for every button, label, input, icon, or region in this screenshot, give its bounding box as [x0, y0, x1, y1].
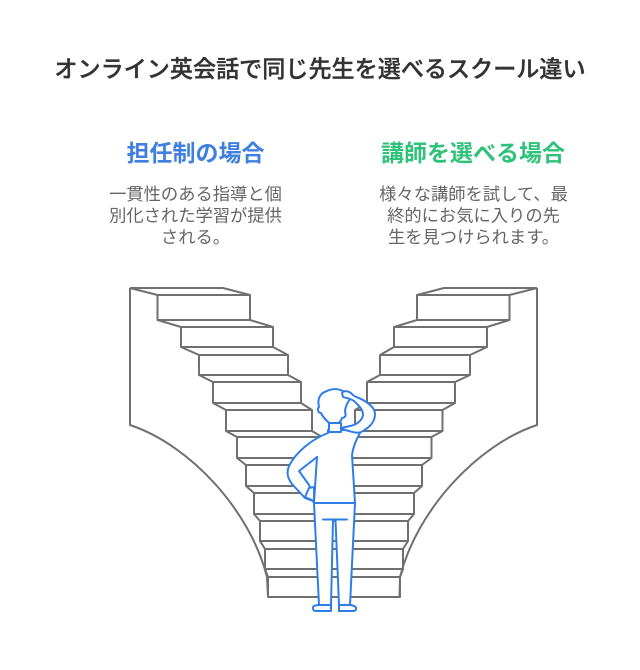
left arm inner edge — [299, 457, 317, 493]
text block: selectable description: 様々な講師を試して、最 — [379, 184, 568, 204]
heading: selectable: 講師を選べる場合 — [381, 140, 565, 166]
text block: homeroom description: 別化された学習が提供 — [109, 206, 282, 226]
shoes — [313, 605, 331, 611]
raised arm — [341, 391, 375, 433]
text block: selectable description — [379, 184, 568, 247]
head — [318, 389, 352, 424]
belt line — [314, 502, 355, 504]
right staircase — [320, 288, 537, 597]
body and legs — [288, 430, 360, 605]
text block: homeroom description — [109, 184, 282, 247]
neck — [329, 423, 341, 432]
text block: homeroom description: される。 — [161, 227, 230, 247]
text block: selectable description: 終的にお気に入りの先 — [387, 206, 560, 226]
panel: homeroom teacher — [109, 140, 282, 247]
left staircase — [130, 288, 347, 597]
heading: homeroom: 担任制の場合 — [126, 140, 264, 166]
text block: selectable description: 生を見つけられます。 — [388, 227, 559, 247]
crotch line — [323, 518, 347, 520]
left hand — [305, 487, 314, 501]
text block: homeroom description: 一貫性のある指導と個 — [109, 184, 282, 204]
panel: selectable teachers — [379, 140, 568, 247]
figure: person scratching head — [288, 389, 375, 611]
title: オンライン英会話で同じ先生を選べるスクール違い — [54, 56, 586, 82]
